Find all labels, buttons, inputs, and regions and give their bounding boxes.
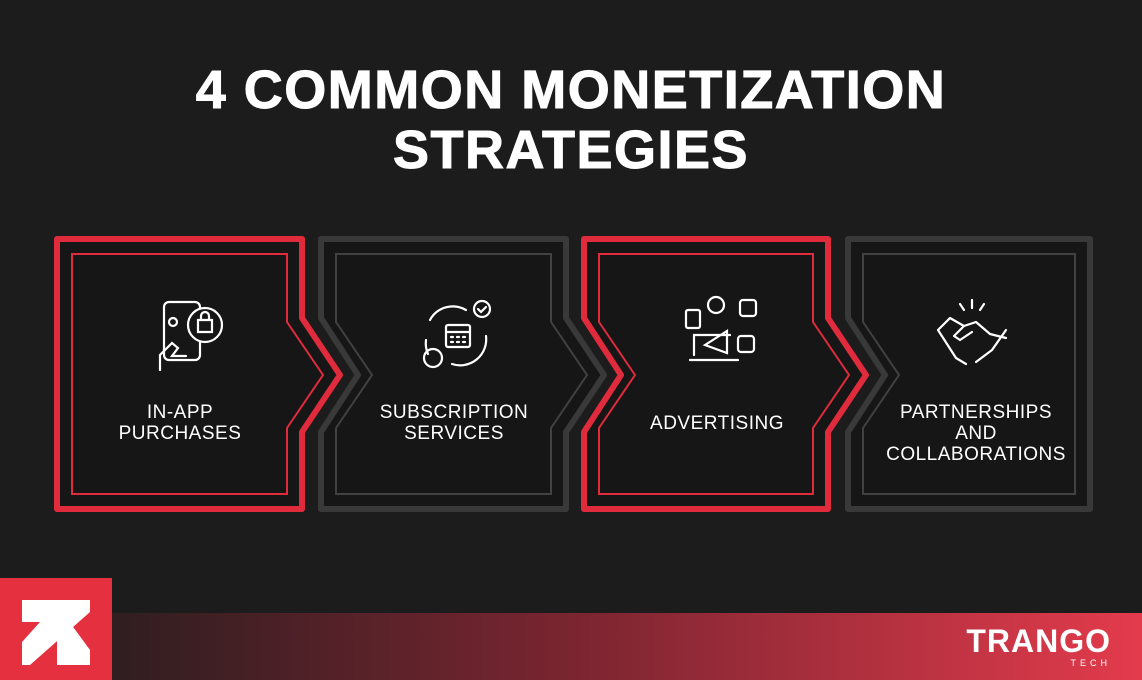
icon: handshake (938, 300, 1006, 364)
label: subscription (380, 402, 528, 444)
label: partnerships: AND (955, 423, 997, 444)
logo mark (0, 578, 112, 680)
label: partnerships (886, 402, 1066, 465)
label: subscription: SERVICES (404, 423, 504, 444)
label: advertising: ADVERTISING (650, 413, 784, 434)
panel: in-app purchases (57, 239, 340, 509)
icon: phone shopping (160, 302, 222, 370)
icon: advertising (686, 297, 756, 360)
label: in-app (119, 402, 241, 444)
panel: partnerships (848, 239, 1090, 509)
title: 4 COMMON MONETIZATION (196, 60, 946, 120)
label: in-app: PURCHASES (119, 423, 241, 444)
icon: subscription (424, 301, 490, 367)
label: partnerships: PARTNERSHIPS (900, 402, 1052, 423)
label: subscription: SUBSCRIPTION (380, 402, 528, 423)
title (196, 60, 946, 180)
logo text: TECH (1070, 658, 1111, 668)
label: in-app: IN-APP (147, 402, 213, 423)
logo text: TRANGO (966, 623, 1111, 659)
label: partnerships: COLLABORATIONS (886, 444, 1066, 465)
panel: advertising (584, 239, 866, 509)
panel: subscription services (321, 239, 604, 509)
title: STRATEGIES (393, 120, 749, 180)
